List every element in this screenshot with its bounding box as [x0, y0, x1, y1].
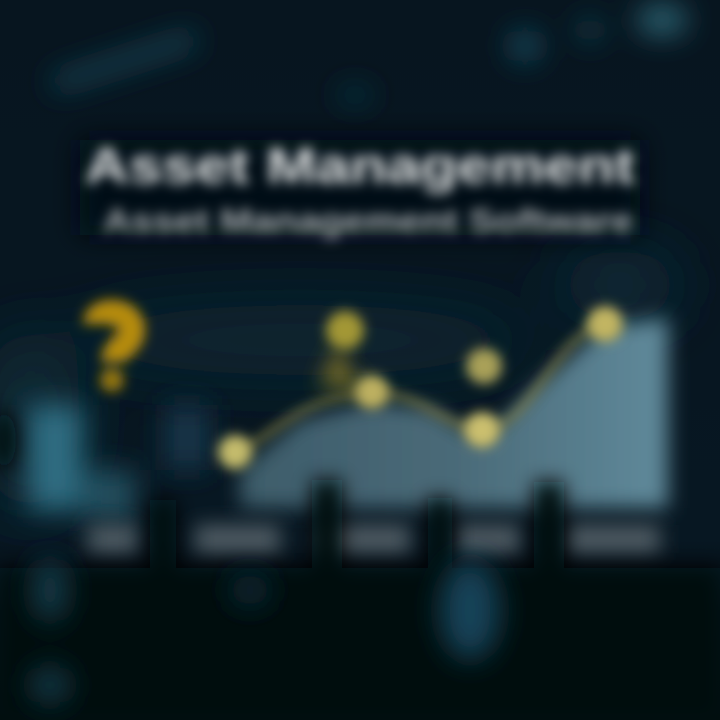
- subtitle: Asset Management Software: [103, 202, 633, 239]
- trend line: [235, 322, 605, 452]
- data points: [218, 306, 623, 469]
- connector from marker to line: [318, 330, 372, 392]
- foreground silhouettes: [0, 410, 720, 720]
- line chart: [218, 306, 623, 469]
- title band shadow: [80, 140, 640, 235]
- title: Asset Management: [85, 138, 635, 194]
- bottom label blocks: [88, 525, 660, 553]
- left glow column: [28, 405, 209, 520]
- background glow: [0, 250, 680, 510]
- area chart fill: [240, 318, 668, 508]
- icon: yellow question mark: [96, 313, 132, 392]
- background streaks: [50, 4, 688, 104]
- foreground teal glows: [30, 558, 500, 703]
